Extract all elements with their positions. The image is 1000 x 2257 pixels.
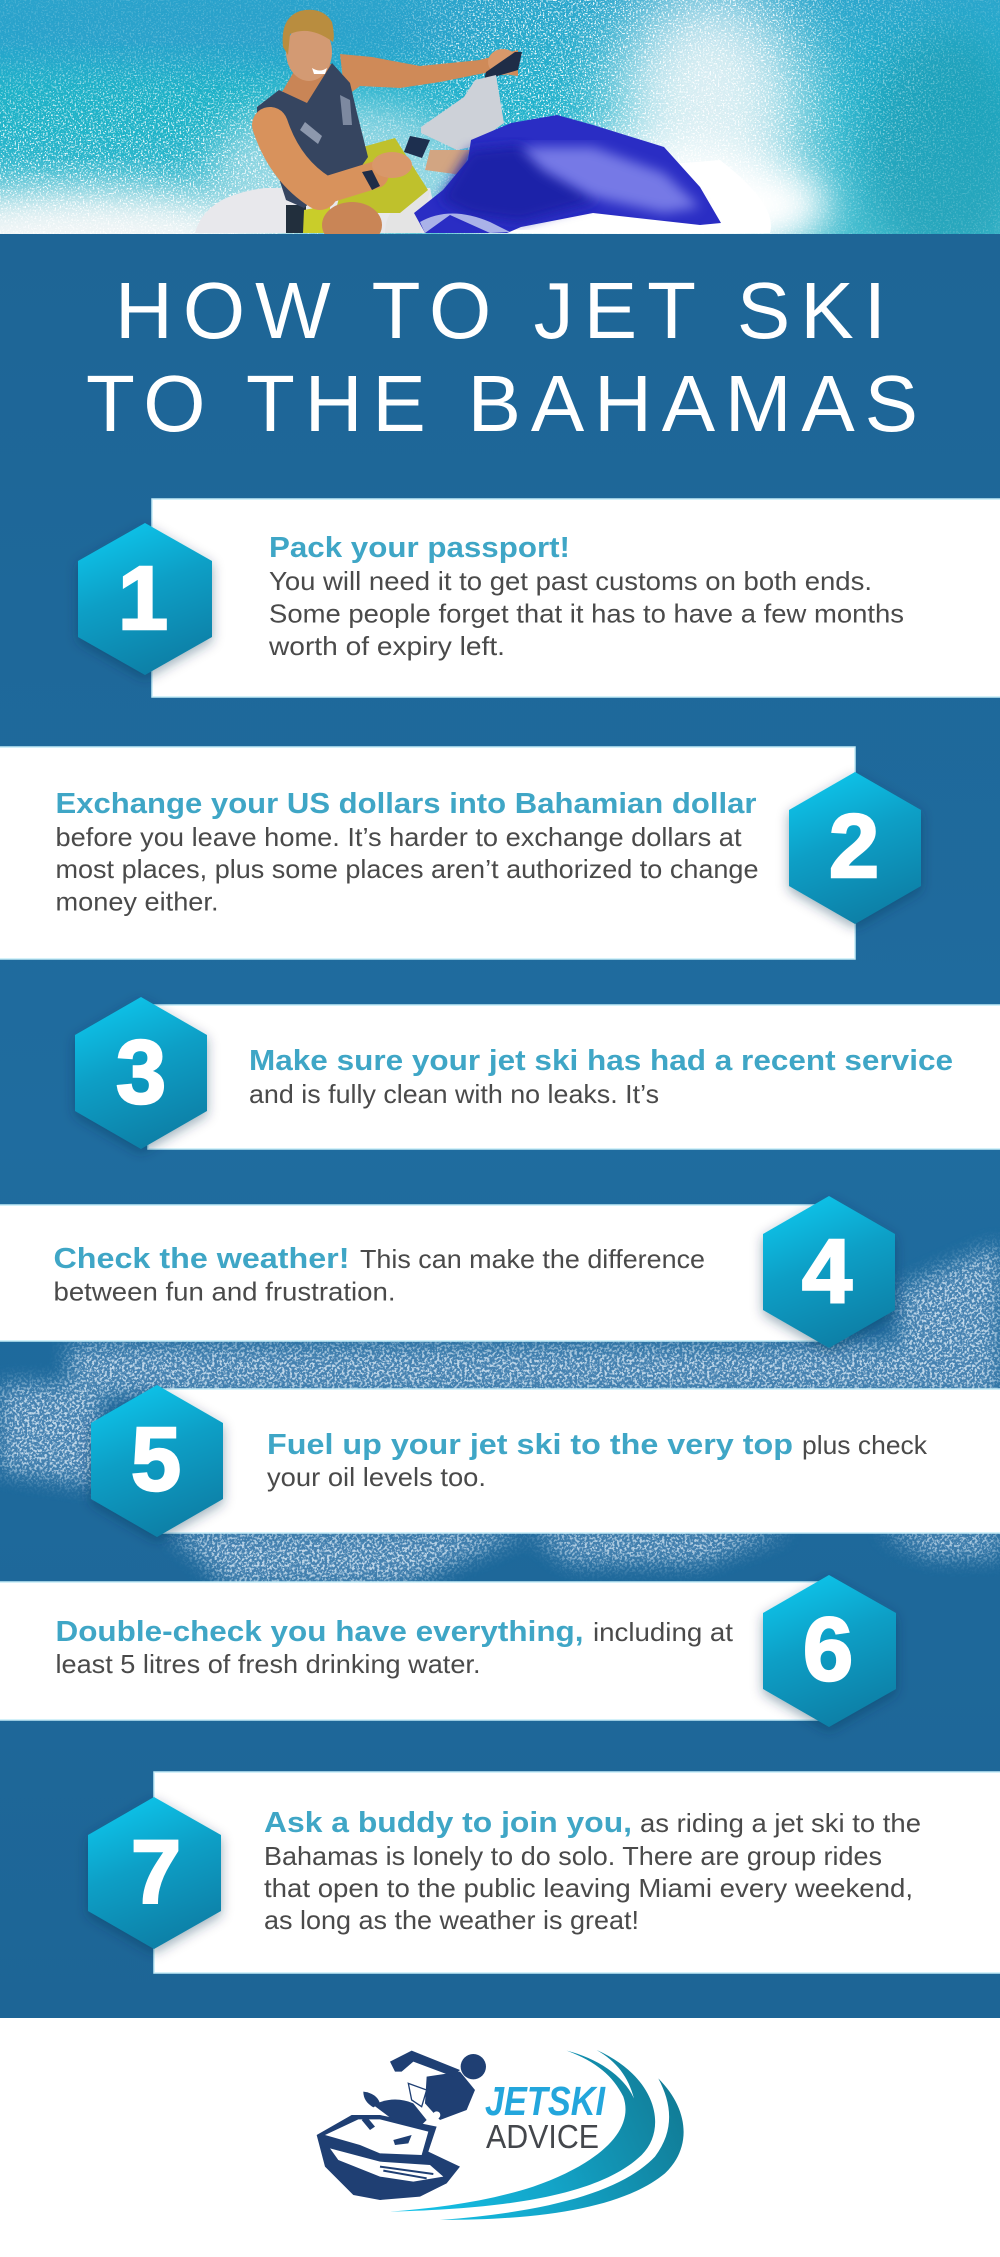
title: TO THE BAHAMAS bbox=[86, 359, 918, 448]
step 4 text: This can make the difference bbox=[360, 1244, 705, 1274]
step 5 number: 5 bbox=[131, 1410, 181, 1510]
step 6 number: 6 bbox=[803, 1600, 853, 1700]
title bbox=[86, 266, 918, 448]
step 1 text bbox=[268, 532, 904, 661]
logo wordmark: JETSKI bbox=[485, 2078, 606, 2124]
step 1 text: worth of expiry left. bbox=[268, 631, 505, 661]
step 6 text: including at bbox=[593, 1617, 734, 1647]
step 1 hexagon badge bbox=[78, 523, 212, 675]
step 1 number: 1 bbox=[118, 549, 168, 649]
jet ski handlebar bbox=[421, 75, 504, 150]
blue background panel bbox=[0, 234, 1000, 2018]
step 6 text bbox=[56, 1616, 734, 1679]
logo jet ski and rider bbox=[317, 2051, 486, 2200]
rider: neck and chest bbox=[282, 64, 338, 110]
step 3 text: Make sure your jet ski has had a recent service bbox=[249, 1045, 953, 1077]
step 2 text: before you leave home. It’s harder to exchange dollars at bbox=[56, 822, 742, 852]
rider: shorts bbox=[335, 138, 428, 213]
logo: Jetski Advice: ADVICE bbox=[486, 2118, 599, 2155]
logo: Jetski Advice bbox=[317, 2050, 684, 2220]
step 5 text: Fuel up your jet ski to the very top bbox=[267, 1429, 793, 1461]
title: HOW TO JET SKI bbox=[115, 266, 886, 355]
water foam texture bbox=[0, 1234, 1000, 1582]
step 6 text: Double-check you have everything, bbox=[56, 1616, 584, 1648]
step 7 text: Ask a buddy to join you, bbox=[264, 1807, 632, 1839]
step 2 number: 2 bbox=[829, 797, 879, 897]
step 5 text: plus check bbox=[802, 1430, 928, 1460]
step 3 text bbox=[249, 1045, 953, 1109]
step 1 text: Pack your passport! bbox=[269, 532, 570, 564]
step 5 bbox=[91, 1385, 1000, 1537]
step 4 hexagon badge bbox=[763, 1196, 895, 1348]
step 7 text: that open to the public leaving Miami every weekend, bbox=[264, 1873, 913, 1903]
step 7 text: as long as the weather is great! bbox=[264, 1905, 639, 1935]
jet ski blue hood bbox=[414, 115, 721, 233]
step 4 text: between fun and frustration. bbox=[54, 1276, 396, 1306]
step 4 number: 4 bbox=[802, 1222, 852, 1322]
step 7 text: as riding a jet ski to the bbox=[640, 1808, 921, 1838]
step 7 number: 7 bbox=[131, 1823, 181, 1923]
step 2 text: money either. bbox=[56, 886, 218, 916]
step 3 bbox=[75, 997, 1000, 1149]
step 3 text: and is fully clean with no leaks. It’s bbox=[249, 1079, 659, 1109]
step 2 bbox=[0, 747, 921, 959]
step 6 bbox=[0, 1575, 896, 1727]
step 4 text: Check the weather! bbox=[54, 1243, 350, 1275]
rider: knee bbox=[322, 202, 382, 248]
step 1 bbox=[78, 499, 1000, 697]
step 7 bbox=[88, 1772, 1000, 1973]
rider: outstretched arm bbox=[340, 50, 518, 97]
step 4 bbox=[0, 1196, 895, 1348]
logo swooshes bbox=[390, 2050, 684, 2220]
step 3 hexagon badge bbox=[75, 997, 207, 1149]
step 7 text bbox=[264, 1807, 921, 1935]
step 7 text: Bahamas is lonely to do solo. There are group rides bbox=[264, 1841, 882, 1871]
step 5 hexagon badge bbox=[91, 1385, 223, 1537]
rider: head bbox=[286, 23, 332, 81]
rider: life vest bbox=[257, 63, 368, 208]
hero photo: rider on jet ski bbox=[0, 0, 1000, 234]
step 1 text: You will need it to get past customs on both ends. bbox=[269, 566, 872, 596]
jet ski hull bbox=[195, 188, 440, 233]
step 3 number: 3 bbox=[116, 1023, 166, 1123]
step 5 text bbox=[267, 1429, 928, 1492]
step 2 text: Exchange your US dollars into Bahamian dollar bbox=[56, 788, 757, 820]
step 2 text: most places, plus some places aren’t authorized to change bbox=[56, 854, 758, 884]
step 6 hexagon badge bbox=[763, 1575, 896, 1727]
step 2 text bbox=[56, 788, 758, 916]
step 5 text: your oil levels too. bbox=[267, 1462, 486, 1492]
step 4 text bbox=[54, 1243, 705, 1306]
step 2 hexagon badge bbox=[789, 772, 921, 924]
rider: bent arm bbox=[270, 125, 320, 192]
step 6 text: least 5 litres of fresh drinking water. bbox=[56, 1649, 480, 1679]
step 7 hexagon badge bbox=[88, 1797, 221, 1949]
step 1 text: Some people forget that it has to have a few months bbox=[269, 598, 904, 628]
